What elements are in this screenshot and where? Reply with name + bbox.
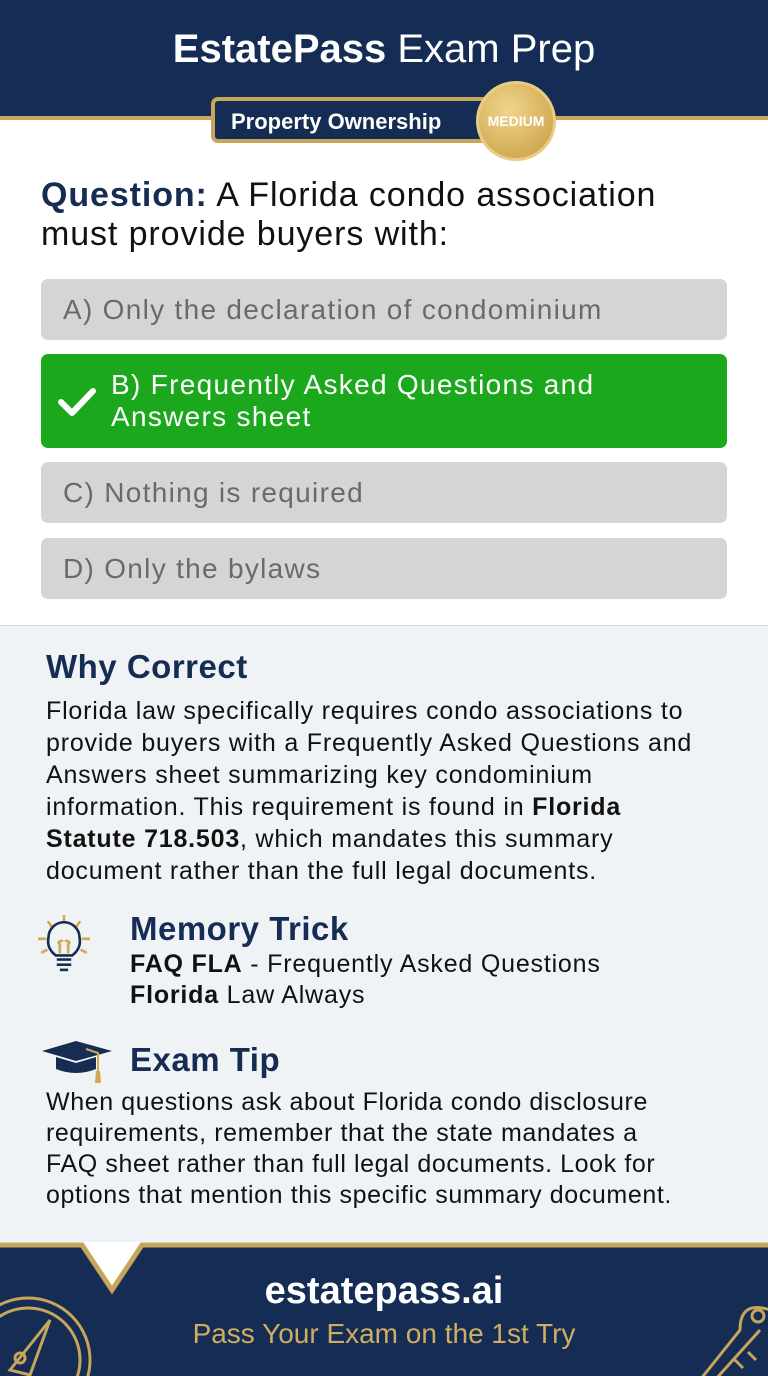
text: why correct: Answers sheet summarizing key condominium [46, 761, 593, 789]
badge: difficulty [476, 81, 556, 161]
question: must provide buyers with: [41, 215, 449, 253]
text: exam tip: When questions ask about Florida condo disclosure [46, 1088, 648, 1116]
icon: graduation cap [42, 1041, 112, 1083]
text: exam tip [46, 1088, 672, 1209]
icon: checkmark [58, 388, 96, 416]
option C: C) Nothing is required [63, 476, 364, 508]
option C [41, 462, 727, 523]
text: memory trick: FAQ FLA - Frequently Asked Questions [130, 950, 601, 978]
option D [41, 538, 727, 599]
title: EstatePass Exam Prep [173, 27, 595, 71]
text: why correct: information. This requirement is found in Florida [46, 793, 621, 821]
option B correct: Answers sheet [111, 401, 312, 432]
badge: difficulty: MEDIUM [488, 113, 544, 129]
badge: category: Property Ownership [231, 109, 441, 134]
text: exam tip: options that mention this specific summary document. [46, 1181, 672, 1209]
footer [0, 1242, 768, 1376]
text: why correct [46, 697, 692, 885]
heading: exam tip: Exam Tip [130, 1041, 280, 1078]
text: memory trick [130, 950, 601, 1009]
icon: lightbulb [38, 915, 90, 972]
text: exam tip: requirements, remember that the state mandates a [46, 1119, 638, 1147]
header band [0, 0, 768, 120]
text: exam tip: FAQ sheet rather than full legal documents. Look for [46, 1150, 655, 1178]
option A: A) Only the declaration of condominium [63, 294, 603, 324]
text: why correct: Statute 718.503, which mandates this summary [46, 825, 613, 853]
text: memory trick: Florida Law Always [130, 981, 365, 1009]
badge: category [211, 97, 501, 143]
question: Question: A Florida condo association [41, 176, 656, 214]
footer brand: estatepass.ai [265, 1270, 503, 1312]
option B correct: B) Frequently Asked Questions and [111, 369, 594, 400]
option D: D) Only the bylaws [63, 552, 321, 584]
option B correct [41, 354, 727, 448]
text: why correct: document rather than the full legal documents. [46, 857, 597, 885]
option A [41, 279, 727, 340]
text: why correct: Florida law specifically requires condo associations to [46, 697, 683, 725]
text: why correct: provide buyers with a Frequently Asked Questions and [46, 729, 692, 757]
question [41, 176, 656, 253]
footer tagline: Pass Your Exam on the 1st Try [193, 1318, 575, 1349]
heading: memory trick: Memory Trick [130, 910, 349, 947]
heading: why correct: Why Correct [46, 648, 248, 685]
explanation panel [0, 625, 768, 1242]
